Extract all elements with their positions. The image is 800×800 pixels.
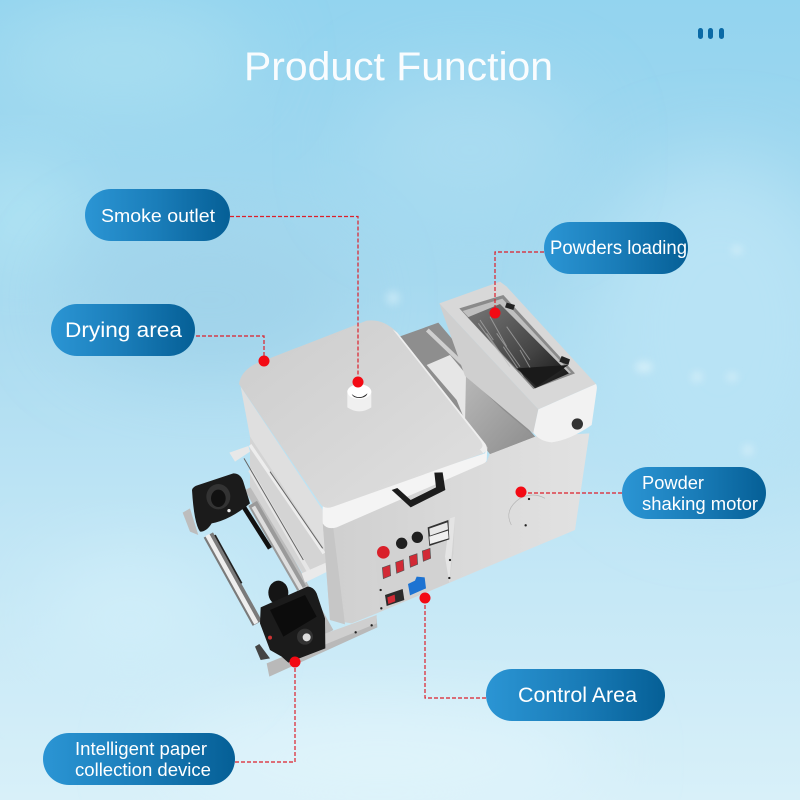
- paper collection device: [192, 473, 325, 663]
- callout: control area: Control Area: [518, 684, 637, 707]
- callout: drying area: Drying area: [65, 319, 182, 342]
- callout: powders loading: [490, 222, 688, 318]
- callout: intelligent paper collection device: [43, 656, 300, 785]
- machine front body: [323, 433, 589, 623]
- callout: powder shaking motor: shaking motor: [642, 494, 758, 514]
- lid handle: [392, 472, 445, 507]
- smoke pipe: [347, 384, 371, 411]
- callout: smoke outlet: Smoke outlet: [101, 206, 215, 226]
- hopper channel: [399, 323, 535, 454]
- callout: intelligent paper collection device: collection device: [75, 760, 211, 780]
- knob: [572, 418, 583, 430]
- callout: smoke outlet: [85, 189, 364, 388]
- control panel: [354, 498, 530, 633]
- left body shade: [323, 522, 345, 624]
- callout: powder shaking motor: [516, 467, 766, 519]
- callout: powders loading: Powders loading: [550, 238, 687, 259]
- base rails: [183, 486, 377, 677]
- dryer lid: [239, 320, 487, 528]
- title: Product Function: [244, 45, 553, 89]
- machine illustration: [183, 282, 597, 677]
- callout: powder shaking motor: Powder: [642, 473, 704, 493]
- motor outline: [509, 495, 545, 525]
- icon: three dots menu: [698, 28, 724, 39]
- callout: control area: [420, 592, 665, 721]
- powder hopper: [439, 282, 597, 442]
- callout: drying area: [51, 304, 270, 366]
- machine left side with rods: [229, 387, 327, 583]
- callout: intelligent paper collection device: Intelligent paper: [75, 739, 207, 759]
